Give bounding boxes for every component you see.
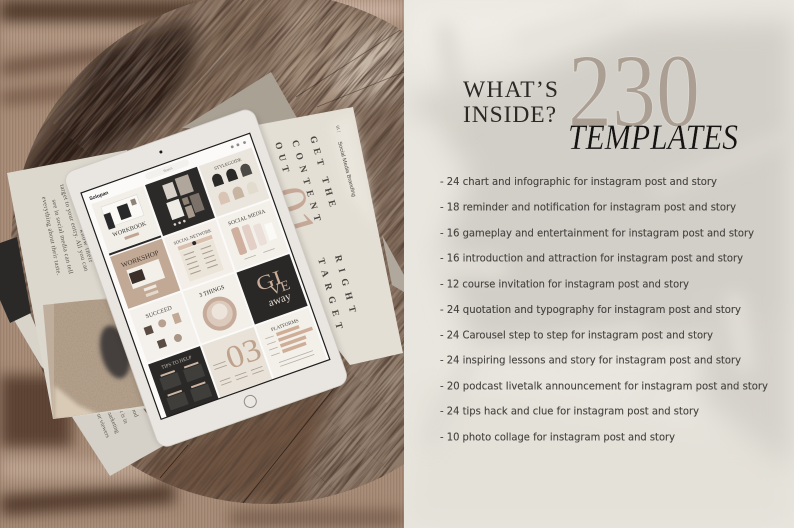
tile: platforms: PLATFORMS — [271, 319, 300, 333]
tile: three things — [183, 273, 253, 344]
search bar: Search — [163, 166, 173, 173]
template list: - 16 gameplay and entertainment for instagram post and story — [440, 228, 754, 240]
template list: - 18 reminder and notification for instagram post and story — [440, 202, 736, 214]
panel: product photo — [0, 0, 404, 528]
left sheet text: see in social media can tell — [50, 199, 74, 275]
paper: grey sheet right edge — [382, 235, 404, 292]
heading: 230 number: 230 — [568, 32, 700, 149]
tablet body — [63, 107, 350, 449]
screen — [81, 133, 330, 419]
bottom card text: Good — [128, 404, 139, 418]
tile: social media chart: SOCIAL MEDIA — [227, 209, 266, 227]
template list: - 12 course invitation for instagram post and story — [440, 278, 689, 290]
tile: social media chart — [217, 200, 289, 271]
search bar — [146, 160, 189, 180]
home button — [244, 394, 257, 408]
heading: what's inside: INSIDE? — [463, 102, 556, 128]
sheet headline text: RIGHT — [332, 254, 357, 314]
bottom card text: our viewers — [94, 411, 111, 439]
tile: number 03: 03 — [221, 330, 266, 376]
tile: tips dark — [148, 346, 219, 417]
sheet label: Social Media Branding — [336, 141, 357, 198]
plank seams — [160, 30, 404, 503]
tile: workshop: WORKSHOP — [120, 249, 160, 269]
fabric background — [0, 0, 404, 528]
wood grain — [11, 0, 404, 504]
sheet headline text: CONTENT — [289, 139, 322, 223]
tile: give away: VE — [268, 278, 292, 299]
sheet headline text: GET THE — [307, 135, 337, 208]
tile: succeed — [129, 292, 199, 363]
paper: bottom card — [72, 408, 163, 476]
tablet — [63, 107, 350, 449]
tile: give away — [237, 254, 308, 325]
paper: lower left card — [0, 296, 60, 385]
paper: left text sheet — [7, 150, 146, 419]
screen bezel line — [81, 133, 330, 419]
tile: workbook — [91, 186, 161, 256]
sheet headline text — [272, 135, 357, 331]
tile: succeed: SUCCEED — [145, 305, 173, 320]
paper: photo print — [43, 298, 144, 419]
bottom card text: marketing — [105, 410, 120, 434]
template list: - 24 chart and infographic for instagram post and story — [440, 176, 717, 188]
tile: style colours: STYLEGUIDE — [213, 157, 242, 171]
tile: social network — [164, 220, 234, 290]
tile: dark collage — [145, 167, 215, 236]
left sheet text: target to your entry. All you can — [58, 184, 90, 273]
app name: Solopan — [89, 190, 109, 202]
dark card left — [0, 237, 31, 323]
camera — [159, 150, 162, 154]
round wooden table — [11, 0, 404, 504]
template list: - 10 photo collage for instagram post and story — [440, 432, 675, 444]
template list — [440, 176, 768, 444]
header icons — [230, 141, 246, 149]
tile: platforms — [256, 308, 327, 379]
heading: what's inside — [463, 77, 558, 128]
bottom card text — [97, 410, 139, 438]
template list: - 20 podcast livetalk announcement for instagram post and story — [440, 380, 768, 392]
sheet headline text: OUT — [272, 141, 290, 174]
tile: number 03 — [202, 327, 272, 398]
tile: give away: away — [267, 290, 293, 309]
template list: - 24 quotation and typography for instagram post and story — [440, 304, 741, 316]
tile: three things: 3 THINGS — [199, 285, 225, 299]
sheet headline text: TARGET — [315, 257, 344, 331]
light background with leaf shadows — [404, 0, 794, 528]
bottom card text: it is in — [117, 409, 128, 425]
tile: tips dark: TIPS TO HELP — [161, 356, 193, 371]
paper: grey sheet behind tablet — [182, 72, 297, 130]
template list: - 24 Carousel step to step for instagram post and story — [440, 330, 713, 342]
left sheet text: know their — [78, 229, 94, 264]
sheet page number: 01 | — [335, 125, 342, 133]
heading: templates: TEMPLATES — [568, 117, 738, 157]
tile: social network: SOCIAL NETWORK — [173, 228, 213, 246]
tile: workbook: WORKBOOK — [112, 221, 148, 239]
left sheet text — [40, 184, 94, 276]
paper: right sheet with headline — [257, 107, 403, 365]
template list: - 24 tips hack and clue for instagram post and story — [440, 406, 699, 418]
tile: workshop — [110, 239, 180, 309]
heading: what's inside: WHAT’S — [463, 77, 558, 103]
tile: give away: GI — [253, 267, 285, 296]
large number 01: 01 — [257, 180, 326, 246]
panel: text side — [404, 0, 794, 528]
template list: - 24 inspiring lessons and story for instagram post and story — [440, 354, 741, 366]
tile: style colours — [199, 147, 270, 217]
left sheet text: everything about their taste. — [40, 196, 62, 276]
template list: - 16 introduction and attraction for instagram post and story — [440, 252, 743, 264]
tablet shadow — [66, 111, 349, 449]
